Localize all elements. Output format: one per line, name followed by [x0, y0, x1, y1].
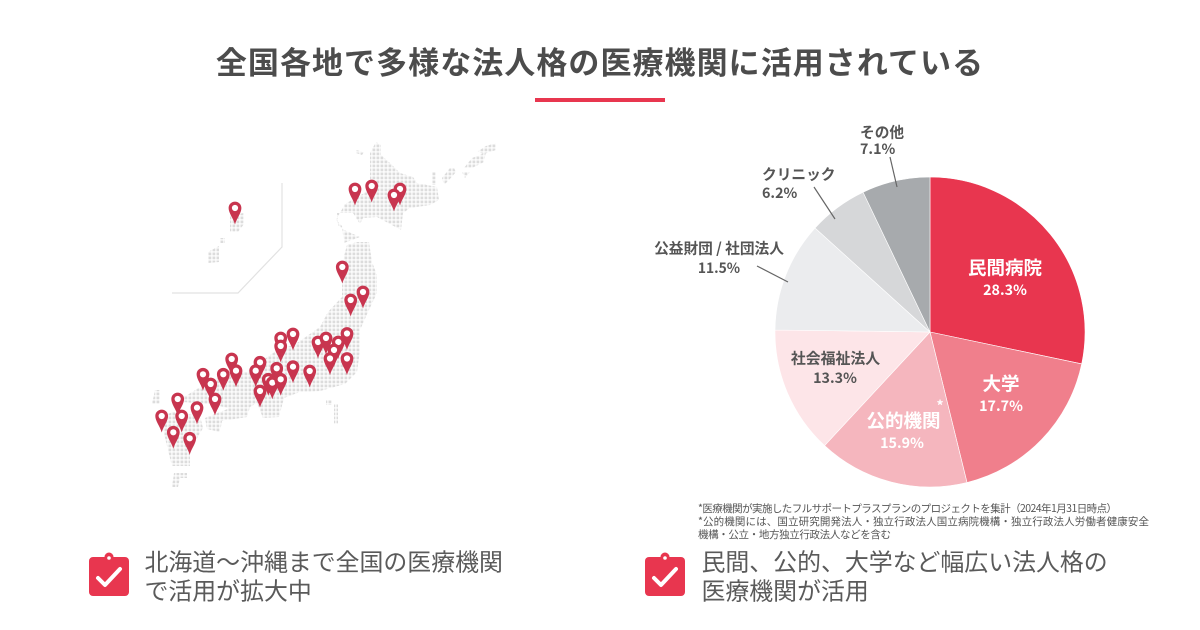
footnotes: *医療機関が実施したフルサポートプラスプランのプロジェクトを集計（2024年1月31日時点） [698, 501, 1117, 516]
pie label: public institutions: 公的機関 [866, 408, 941, 434]
pie label: social welfare: 社会福祉法人 [791, 348, 880, 368]
slice: foundations [775, 228, 930, 332]
pie label: foundations [654, 238, 784, 277]
pie leader lines [757, 157, 897, 282]
pie label: universities: 大学 [982, 370, 1020, 396]
pie label: social welfare [791, 348, 880, 388]
pie label: social welfare: 13.3% [813, 367, 857, 388]
slice: public institutions [825, 332, 967, 487]
pie label: private hospitals: 民間病院 [968, 254, 1042, 280]
slice: private hospitals [930, 177, 1085, 364]
pie chart [775, 177, 1085, 487]
pie label: foundations: 11.5% [698, 257, 740, 277]
text: legal entity types: 民間、公的、大学など幅広い法人格の [702, 542, 1108, 578]
pie label: clinics: クリニック [762, 164, 835, 184]
title: 全国各地で多様な法人格の医療機関に活用されている [216, 38, 984, 83]
pie label: other: 7.1% [860, 138, 896, 159]
slice: other [863, 177, 930, 332]
pie label: clinics [762, 164, 835, 203]
inset divider [172, 183, 282, 293]
pie label: private hospitals: 28.3% [983, 279, 1027, 300]
location pins [155, 180, 406, 455]
footnotes [698, 501, 1150, 542]
pie label: universities: 17.7% [979, 395, 1023, 416]
slice: social welfare [775, 330, 930, 446]
text: nationwide [144, 542, 503, 606]
footnotes: *公的機関には、国立研究開発法人・独立行政法人国立病院機構・独立行政法人労働者健康安全 [698, 514, 1150, 529]
footnotes: 機構・公立・地方独立行政法人などを含む [698, 527, 891, 542]
pie label: private hospitals [968, 254, 1042, 300]
pie label: public institutions: * [936, 396, 944, 416]
text: nationwide: で活用が拡大中 [144, 572, 312, 606]
pie label: universities [979, 370, 1023, 416]
slice: universities [930, 332, 1082, 482]
pie label: foundations: 公益財団 / 社団法人 [654, 238, 784, 258]
pie label: public institutions: 15.9% [880, 432, 924, 453]
pie label: public institutions [866, 396, 944, 453]
slice: clinics [815, 192, 930, 332]
text: legal entity types: 医療機関が活用 [702, 572, 869, 606]
icon: clipboard check right [645, 552, 685, 596]
map of Japan [152, 142, 496, 487]
title underline [535, 98, 665, 102]
icon: clipboard check left [89, 552, 129, 596]
text: legal entity types [702, 542, 1108, 606]
pie label: clinics: 6.2% [762, 182, 798, 203]
pie label: other: その他 [860, 122, 904, 142]
pie label: other [860, 122, 904, 159]
text: nationwide: 北海道〜沖縄まで全国の医療機関 [144, 542, 503, 578]
dotted land masses [152, 142, 496, 487]
